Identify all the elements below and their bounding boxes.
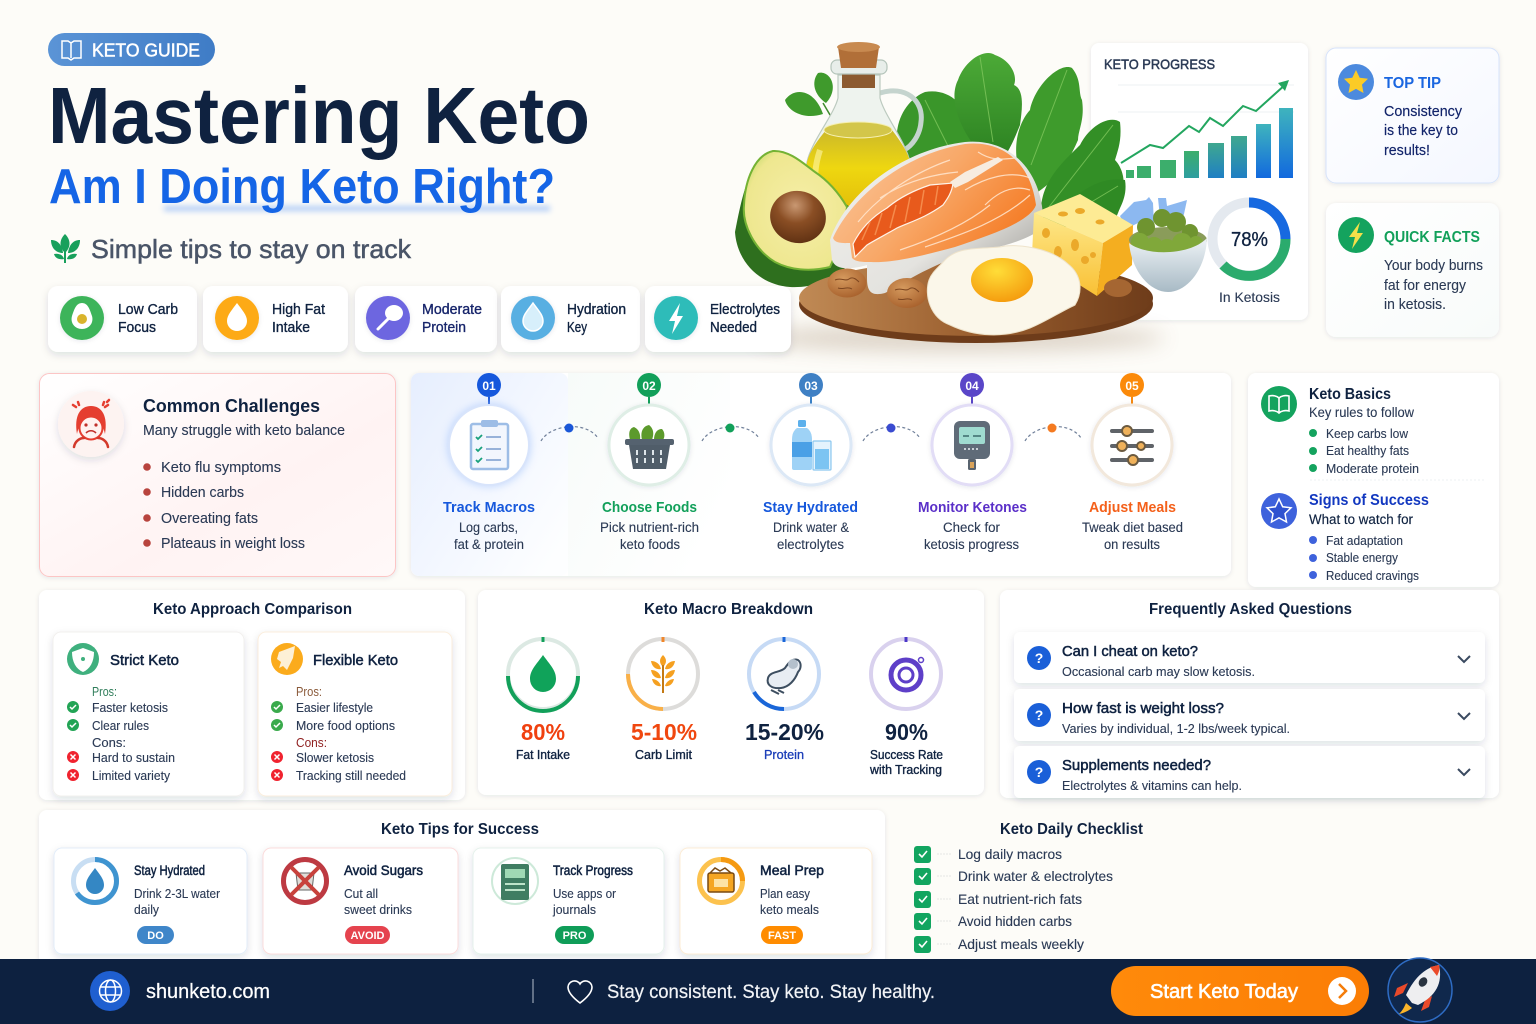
pill: electrolytes needed: Needed — [710, 320, 757, 336]
pill: high fat intake: Intake — [272, 320, 310, 336]
pill: high fat intake — [203, 286, 348, 352]
panel: daily checklist: Adjust meals weekly — [958, 936, 1084, 952]
tip: stay hydrated: Drink 2-3L water — [134, 887, 220, 901]
leafy greens — [785, 53, 1126, 235]
list: signs: Reduced cravings — [1326, 569, 1419, 583]
tip: meal prep: keto meals — [760, 903, 819, 917]
list: challenges: Keto flu symptoms — [161, 460, 281, 476]
icon: wheat — [651, 655, 675, 693]
tip: stay hydrated — [54, 848, 247, 954]
card: strict keto: Pros: — [92, 685, 117, 699]
button: start keto today — [1111, 966, 1369, 1016]
card: flexible keto: Slower ketosis — [296, 751, 374, 765]
faq item 3 — [1014, 746, 1485, 798]
icon: stressed face — [58, 391, 124, 457]
pill: high fat intake: High Fat — [272, 302, 325, 318]
panel: daily checklist: Drink water & electrolytes — [958, 868, 1113, 884]
card: quick facts: QUICK FACTS — [1384, 229, 1480, 246]
pill: moderate protein: Moderate — [422, 302, 482, 318]
card: quick facts: Your body burns — [1384, 258, 1483, 274]
icon: globe — [90, 971, 130, 1011]
stat: success rate: 90% — [885, 719, 928, 745]
faq item 1 — [1014, 632, 1485, 683]
stat: fat intake — [508, 637, 578, 762]
icons: checks and crosses — [67, 701, 79, 781]
pill: low carb focus: Focus — [118, 320, 156, 336]
checkboxes — [914, 846, 952, 953]
tag: DO — [147, 930, 164, 942]
tip: avoid sugars: Cut all — [344, 887, 378, 901]
footer bar — [0, 958, 1536, 1024]
panel: daily checklist — [914, 821, 1144, 953]
faq item 1: Can I cheat on keto? — [1062, 644, 1198, 660]
list: basics: Eat healthy fats — [1326, 444, 1409, 458]
icon: clipboard — [471, 420, 508, 469]
card: strict keto: Limited variety — [92, 769, 171, 783]
tip: track progress: Track Progress — [553, 863, 633, 878]
step 3: Stay Hydrated — [763, 499, 858, 516]
progress card: In Ketosis — [1219, 289, 1280, 305]
tag: AVOID — [350, 930, 385, 942]
step 1 — [443, 373, 535, 552]
faq item 2 — [1014, 689, 1485, 741]
list: challenges: Overeating fats — [161, 511, 258, 527]
faq item 2: Varies by individual, 1-2 lbs/week typical. — [1062, 722, 1290, 736]
line chart arrow — [1121, 80, 1289, 163]
salmon steak — [830, 142, 1043, 294]
step 4: 04 — [965, 379, 979, 393]
faq item 3: Supplements needed? — [1062, 758, 1211, 774]
avocado — [735, 151, 850, 287]
step 4 — [918, 373, 1027, 552]
stat: carb limit: 5-10% — [631, 719, 697, 745]
tip: avoid sugars: sweet drinks — [344, 903, 412, 917]
panel: five steps — [411, 373, 1231, 576]
food illustration — [735, 42, 1207, 352]
panel: daily checklist: Eat nutrient-rich fats — [958, 891, 1082, 907]
pill: moderate protein — [355, 286, 497, 352]
stat: success rate — [869, 637, 943, 777]
panel: keto tips: Keto Tips for Success — [381, 821, 539, 838]
feature pills row — [48, 286, 791, 352]
step 4: Monitor Ketones — [918, 499, 1027, 516]
panel: faq: Frequently Asked Questions — [1149, 601, 1352, 618]
pill: low carb focus: Low Carb — [118, 302, 178, 318]
card: flexible keto — [258, 632, 452, 796]
card: flexible keto: Pros: — [296, 685, 322, 699]
progress card: KETO PROGRESS — [1104, 56, 1215, 72]
walnuts — [828, 268, 1132, 308]
badge: keto guide: KETO GUIDE — [92, 40, 200, 60]
icon: open book — [62, 41, 81, 60]
tag — [555, 926, 594, 944]
step 5 — [1082, 373, 1183, 552]
step 2: Pick nutrient-rich — [600, 520, 699, 535]
icon: star — [1261, 493, 1297, 529]
icon: sliders — [1112, 426, 1152, 465]
tip: track progress — [473, 848, 664, 954]
button: start keto today: Start Keto Today — [1150, 981, 1298, 1003]
card: strict keto — [53, 632, 244, 796]
icon: ketone meter — [954, 421, 990, 470]
icon: star — [1338, 64, 1374, 100]
step 3: electrolytes — [777, 537, 844, 552]
stat: protein — [745, 637, 824, 762]
panel: basics and signs — [1248, 373, 1499, 587]
ground shadow — [755, 324, 1165, 352]
step 1: fat & protein — [454, 537, 524, 552]
icon: leaves — [51, 234, 80, 263]
olive bowl — [1129, 209, 1207, 292]
list: signs: Stable energy — [1326, 551, 1399, 565]
card: quick facts: in ketosis. — [1384, 297, 1446, 313]
step 5: Tweak diet based — [1082, 520, 1183, 535]
tip: track progress: Use apps or — [553, 887, 616, 901]
card: flexible keto: Flexible Keto — [313, 653, 398, 669]
list: signs — [1309, 534, 1419, 583]
icon: shield — [67, 643, 99, 675]
stat: carb limit: Carb Limit — [635, 748, 693, 762]
step 2: Choose Foods — [602, 499, 697, 516]
card: flexible keto: More food options — [296, 719, 395, 733]
list: signs: Fat adaptation — [1326, 534, 1403, 548]
tagline with leaf icon: Simple tips to stay on track — [91, 234, 412, 264]
tip: avoid sugars: Avoid Sugars — [344, 863, 423, 878]
pill: moderate protein: Protein — [422, 320, 466, 336]
tag — [761, 926, 803, 944]
donut chart 78%: 78% — [1231, 229, 1268, 251]
tip: meal prep: Plan easy — [760, 887, 811, 901]
icon: basket — [625, 425, 674, 469]
panel: keto macro breakdown: Keto Macro Breakdown — [644, 601, 813, 618]
stat: fat intake: 80% — [521, 719, 565, 745]
list: basics: Moderate protein — [1326, 462, 1419, 476]
faq item 1: Occasional carb may slow ketosis. — [1062, 665, 1255, 679]
footer bar: shunketo.com — [146, 981, 270, 1003]
card: top tip — [1326, 48, 1499, 183]
icon: bolt — [1338, 217, 1374, 253]
panel: basics and signs: Key rules to follow — [1309, 405, 1414, 420]
panel: daily checklist: Avoid hidden carbs — [958, 913, 1072, 929]
card: strict keto: Strict Keto — [110, 653, 179, 669]
faq item 3: Electrolytes & vitamins can help. — [1062, 779, 1242, 793]
list: challenges: Hidden carbs — [161, 485, 244, 501]
bar chart — [1126, 108, 1293, 178]
list: challenges: Plateaus in weight loss — [161, 536, 305, 552]
title: Mastering Keto — [48, 71, 590, 160]
card: strict keto: Clear rules — [92, 719, 149, 733]
tip: stay hydrated: daily — [134, 903, 160, 917]
icon: food tag — [271, 643, 303, 675]
badge: keto guide — [48, 33, 215, 66]
tag — [345, 926, 390, 944]
donut chart 78% — [1212, 202, 1286, 276]
card: top tip: results! — [1384, 143, 1430, 159]
panel: keto macro breakdown — [478, 590, 984, 795]
step 5: 05 — [1125, 379, 1139, 393]
panel: common challenges: Many struggle with keto balance — [143, 423, 345, 439]
panel: basics and signs: Signs of Success — [1309, 492, 1429, 509]
stat: carb limit — [628, 637, 698, 762]
card: flexible keto: Easier lifestyle — [296, 701, 373, 715]
faq item 3: ? — [1035, 764, 1043, 780]
panel: basics and signs: Keto Basics — [1309, 386, 1391, 403]
list: basics — [1309, 427, 1419, 476]
footer bar: Stay consistent. Stay keto. Stay healthy. — [607, 981, 935, 1003]
wooden plate — [799, 260, 1153, 343]
card: flexible keto: Tracking still needed — [296, 769, 406, 783]
faq item 2: How fast is weight loss? — [1062, 701, 1224, 717]
card: strict keto: Hard to sustain — [92, 751, 175, 765]
panel: daily checklist: Keto Daily Checklist — [1000, 821, 1144, 838]
icons: checks and crosses — [271, 701, 283, 781]
step 4: Check for — [943, 520, 1000, 535]
stat: fat intake: Fat Intake — [516, 748, 570, 762]
pill: hydration key — [501, 286, 640, 352]
faq item 2: ? — [1035, 707, 1043, 723]
progress card — [1091, 43, 1308, 320]
stat: protein: Protein — [764, 748, 804, 762]
step 5: on results — [1104, 537, 1160, 552]
panel: keto approach comparison — [39, 590, 465, 800]
connector arcs — [541, 427, 1081, 441]
step 3 — [763, 373, 858, 552]
pill: hydration key: Hydration — [567, 302, 626, 318]
stat: success rate: with Tracking — [869, 763, 942, 777]
list: basics: Keep carbs low — [1326, 427, 1409, 441]
blue map shapes — [1120, 197, 1187, 229]
card: flexible keto: Cons: — [296, 736, 327, 750]
pill: low carb focus — [48, 286, 197, 352]
panel: keto approach comparison: Keto Approach Comparison — [153, 601, 352, 618]
step 1: 01 — [482, 379, 496, 393]
card: strict keto: Faster ketosis — [92, 701, 168, 715]
card: quick facts — [1326, 203, 1499, 337]
step 1: Log carbs, — [459, 520, 518, 535]
icon: drumstick — [768, 659, 801, 694]
tag — [137, 926, 174, 944]
panel: daily checklist: Log daily macros — [958, 846, 1062, 862]
pill: electrolytes needed — [645, 286, 791, 352]
step 4: ketosis progress — [924, 537, 1019, 552]
icon: bottle and glass — [792, 420, 831, 470]
subtitle with glow underline: Am I Doing Keto Right? — [49, 160, 555, 214]
olive oil bottle — [806, 42, 921, 221]
step 2: keto foods — [620, 537, 680, 552]
pill: electrolytes needed: Electrolytes — [710, 302, 780, 318]
tip: stay hydrated: Stay Hydrated — [134, 863, 205, 878]
step 1: Track Macros — [443, 499, 535, 516]
card: quick facts: fat for energy — [1384, 278, 1467, 294]
tip: avoid sugars — [263, 848, 458, 954]
stat: success rate: Success Rate — [870, 748, 943, 762]
icon: heart — [568, 981, 592, 1003]
card: top tip: is the key to — [1384, 123, 1458, 139]
icon: open book — [1261, 386, 1297, 422]
tip: track progress: journals — [552, 903, 596, 917]
card: top tip: TOP TIP — [1384, 75, 1441, 92]
card: strict keto: Cons: — [92, 736, 126, 750]
step 3: 03 — [804, 379, 818, 393]
cheese wedge — [1032, 194, 1133, 296]
pill: hydration key: Key — [567, 320, 588, 336]
step 3: Drink water & — [773, 520, 849, 535]
stat: protein: 15-20% — [745, 719, 824, 745]
panel: basics and signs: What to watch for — [1309, 512, 1413, 527]
card: top tip: Consistency — [1384, 104, 1463, 120]
panel: keto tips — [39, 810, 885, 965]
tip: meal prep — [680, 848, 872, 954]
step 2 — [600, 373, 699, 552]
fried egg — [927, 246, 1080, 335]
faq item 1: ? — [1035, 650, 1043, 666]
tag: FAST — [768, 930, 796, 942]
panel: common challenges: Common Challenges — [143, 395, 320, 416]
tag: PRO — [563, 930, 587, 942]
step 5: Adjust Meals — [1089, 499, 1176, 516]
list: challenges — [143, 460, 305, 552]
tip: meal prep: Meal Prep — [760, 863, 824, 878]
icon: rocket — [1388, 958, 1452, 1022]
connector dots — [564, 424, 1056, 432]
icon: target — [891, 658, 924, 690]
panel: common challenges — [40, 374, 396, 576]
panel: faq — [1000, 590, 1499, 798]
step 2: 02 — [642, 379, 656, 393]
